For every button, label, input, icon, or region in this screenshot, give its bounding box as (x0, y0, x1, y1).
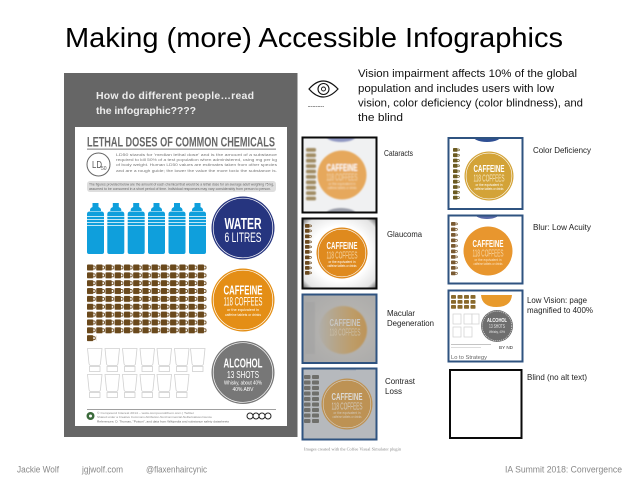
alcohol badge: ALCOHOL (224, 356, 263, 370)
poster heading: LETHAL DOSES OF COMMON CHEMICALS (87, 134, 275, 150)
thumbnail: cataracts: or the equivalent in (328, 182, 356, 186)
thumbnail: blur low acuity: CAFFEINE (472, 238, 504, 250)
LD50 explanation text: required to kill 50% of a test population when administered, using mg per kg (116, 158, 277, 162)
thumbnail: color deficiency: CAFFEINE (474, 163, 504, 175)
poster footer: © Compound Interest 2014 – www.compoundchem.com | Twitter (97, 411, 194, 415)
LD50 explanation text: of body weight. Human LD50 values are estimates taken from other species (116, 163, 277, 167)
poster footer: References: D. Thomas, "Poison", and data from Wikipedia and substance safety datasheets (97, 420, 230, 424)
infographic poster (75, 127, 287, 426)
thumbnail: color deficiency: 118 COFFEES (474, 174, 505, 184)
vision impairment text: vision, color deficiency (color blindness), and (358, 98, 583, 110)
water bottles (87, 203, 206, 254)
icon: LD50 badge: 50 (101, 166, 107, 172)
icon: LD50 badge: LD (92, 160, 102, 171)
label: blind: Blind (no alt text) (527, 372, 587, 382)
thumbnail: macular degeneration: CAFFEINE (330, 318, 361, 329)
alcohol badge (212, 341, 274, 404)
caffeine badge: or the equivalent in (227, 308, 259, 312)
caffeine badge (212, 268, 274, 332)
poster footer (86, 409, 276, 424)
thumbnail: blur low acuity: or the equivalent in (474, 258, 502, 262)
image credit note: Images created with the Coffee Visual Simulator plugin (304, 446, 402, 452)
alcohol badge: Whisky, about 40% (224, 380, 262, 386)
thumbnail: low vision magnified: Whisky, 40% (489, 330, 505, 334)
alcohol badge: 13 SHOTS (227, 369, 259, 381)
footer: author: @flaxenhaircynic (146, 464, 207, 474)
label: macular degeneration: Macular (387, 308, 415, 318)
thumbnail: macular degeneration: 118 COFFEES (330, 328, 361, 338)
panel heading: the infographic???? (96, 105, 196, 117)
thumbnail: cataracts: 118 COFFEES (326, 172, 358, 184)
thumbnail: glaucoma: caffeine tablets or drinks (328, 264, 357, 268)
thumbnail: cataracts: CAFFEINE (326, 162, 358, 174)
label: glaucoma: Glaucoma (387, 229, 422, 239)
caffeine badge: CAFFEINE (224, 284, 262, 298)
footer: conference: IA Summit 2018: Convergence (505, 464, 622, 474)
icon: eye (308, 81, 338, 106)
thumbnail: blur low acuity (448, 209, 522, 284)
panel heading: How do different people…read (96, 90, 254, 102)
label: macular degeneration (387, 308, 434, 328)
thumbnail: cataracts (302, 136, 378, 214)
thumbnail: low vision magnified: BY ND (499, 345, 514, 350)
thumbnail: low vision magnified: ALCOHOL (487, 318, 507, 324)
panel: how do different people read (64, 73, 298, 437)
label: contrast loss (385, 376, 416, 396)
vision impairment text: the blind (358, 112, 403, 124)
footer: author: jgjwolf.com (81, 464, 123, 474)
thumbnail: blur low acuity: 118 COFFEES (472, 248, 504, 260)
thumbnail: glaucoma: or the equivalent in (328, 260, 356, 264)
label: low vision: magnified to 400% (527, 305, 593, 315)
thumbnail: contrast loss (302, 367, 376, 440)
vision impairment text (358, 68, 583, 124)
assumptions note band (87, 181, 276, 192)
water badge: WATER (224, 216, 262, 233)
thumbnail: contrast loss: caffeine tablets or drinks (332, 415, 362, 419)
thumbnail: color deficiency: caffeine tablets or drinks (474, 187, 504, 191)
label: blur low acuity: Blur: Low Acuity (533, 222, 592, 232)
thumbnail: macular degeneration (302, 294, 376, 363)
water badge: 6 LITRES (224, 229, 262, 245)
LD50 explanation text: and are a rough guide; the lower the value the more toxic the substance is. (116, 169, 277, 173)
label: macular degeneration: Degeneration (387, 318, 434, 328)
thumbnail: low vision magnified: 13 SHOTS (489, 324, 505, 330)
thumbnail: glaucoma (302, 218, 376, 288)
label: cataracts: Cataracts (384, 149, 413, 158)
footer: author: Jackie Wolf (17, 464, 59, 474)
water badge (212, 196, 274, 260)
thumbnail: low vision magnified: Lo to Strategy (451, 355, 487, 361)
thumbnail: color deficiency (448, 128, 522, 209)
LD50 explanation text: LD50 stands for 'median lethal dose' and is the amount of a substance (116, 153, 277, 157)
coffee mugs (87, 264, 207, 342)
assumptions note band: The figures provided below are the amount of each chemical that would be a lethal dose for an average adult weighing 75 kg, (89, 182, 274, 186)
label: contrast loss: Loss (385, 386, 402, 396)
label: low vision (527, 295, 593, 315)
caffeine badge: 118 COFFEES (224, 296, 263, 308)
thumbnail: blur low acuity: caffeine tablets or drinks (474, 262, 503, 266)
footer: author (17, 464, 207, 474)
label: contrast loss: Contrast (385, 376, 416, 386)
caffeine badge: caffeine tablets or drinks (225, 313, 261, 317)
thumbnail: low vision magnified (448, 290, 522, 362)
poster footer: Shared under a Creative Commons Attribution-NonCommercial-NoDerivatives licence (97, 415, 212, 419)
label: low vision: Low Vision: page (527, 295, 587, 305)
thumbnail: contrast loss: 118 COFFEES (332, 402, 363, 412)
alcohol badge: 40% ABV (232, 387, 254, 393)
vision impairment text: Vision impairment affects 10% of the global (358, 68, 577, 80)
alcohol shot glasses (88, 348, 205, 398)
title: Making (more) Accessible Infographics (65, 22, 563, 53)
thumbnail: glaucoma: 118 COFFEES (326, 250, 358, 262)
label: color deficiency: Color Deficiency (533, 145, 592, 155)
panel heading (96, 90, 254, 117)
vision impairment text: population and includes users with low (358, 83, 554, 95)
thumbnail: cataracts: caffeine tablets or drinks (328, 186, 357, 190)
thumbnail: color deficiency: or the equivalent in (476, 183, 503, 187)
thumbnail: contrast loss: or the equivalent in (334, 411, 361, 415)
assumptions note band: assumed to be consumed in a short period of time. Individual responses may vary considerably from person to person. (89, 187, 271, 191)
icon: LD50 badge (87, 153, 110, 176)
thumbnail: blind blank (450, 370, 522, 438)
thumbnail: contrast loss: CAFFEINE (332, 391, 362, 403)
thumbnail: glaucoma: CAFFEINE (326, 240, 358, 252)
LD50 explanation text (116, 153, 277, 173)
